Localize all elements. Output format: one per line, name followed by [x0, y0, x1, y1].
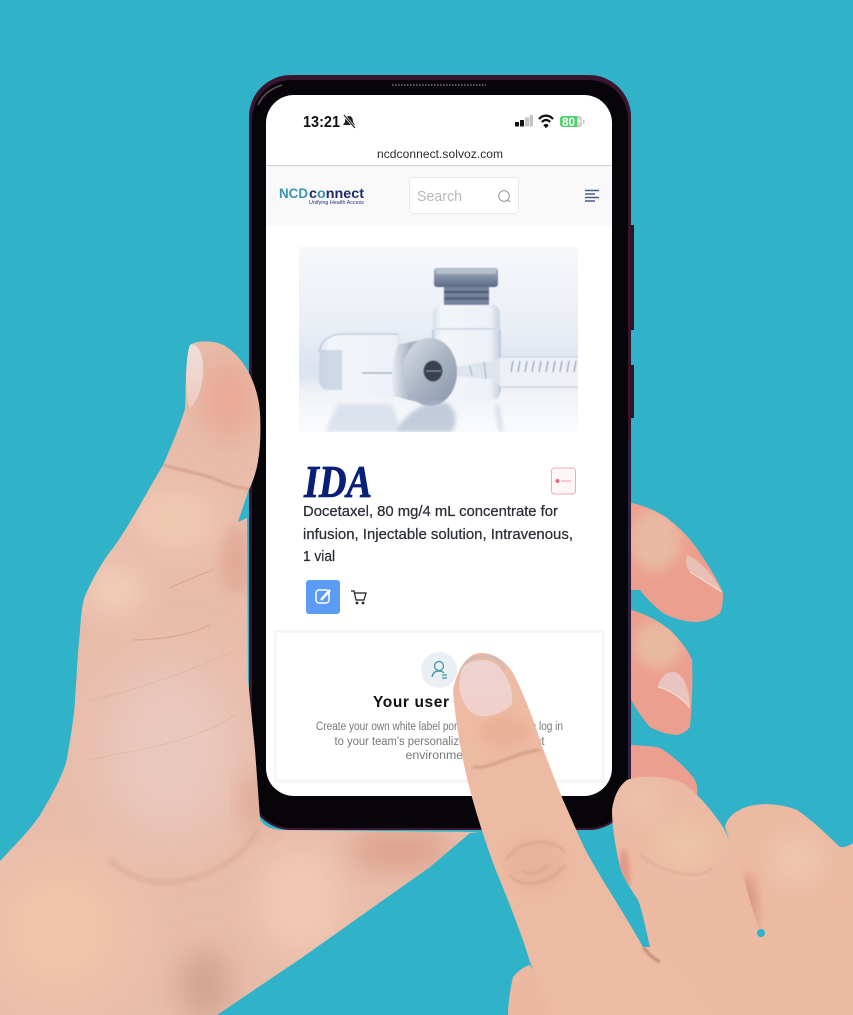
- clock: 13:21: [303, 114, 340, 131]
- button: edit: [306, 580, 340, 614]
- icon: battery: [560, 116, 584, 127]
- icon: muted bell: [343, 115, 355, 128]
- search box: [410, 178, 518, 214]
- icon: battery: 80: [562, 117, 575, 129]
- skin creases: [163, 465, 250, 489]
- left hand finger 1: [631, 503, 723, 622]
- logo: Unifying Health Access: [309, 200, 364, 206]
- logo: connect: [309, 185, 364, 201]
- card body text: environment: [406, 750, 474, 762]
- right hand lower thumb: [508, 965, 565, 1015]
- card: user portal: [274, 630, 605, 783]
- product photo: vials: [299, 247, 580, 432]
- right hand ring finger: [725, 804, 853, 1015]
- status bar: [304, 114, 584, 128]
- icon: wifi: [539, 116, 553, 126]
- product description: Docetaxel, 80 mg/4 mL concentrate for: [303, 503, 558, 520]
- logo: NCD: [279, 185, 308, 201]
- site header: [266, 165, 612, 214]
- icon: signal: [515, 115, 533, 126]
- reflection: [325, 402, 501, 432]
- left hand finger 2: [631, 610, 692, 735]
- product description: infusion, Injectable solution, Intravenous,: [303, 526, 573, 543]
- left hand finger 3: [625, 745, 697, 810]
- side buttons: [630, 225, 634, 418]
- thumb nail: [186, 344, 203, 408]
- badge: [552, 468, 576, 494]
- card body text: Create your own white label portal where you can log in: [316, 721, 563, 733]
- nail: [658, 672, 690, 708]
- icon: user: [421, 652, 457, 688]
- thumb shading: [198, 358, 258, 442]
- product description: [303, 503, 573, 565]
- search box: Search: [417, 188, 462, 205]
- right index finger: [453, 653, 661, 1015]
- logo: [280, 188, 364, 205]
- icon: menu: [585, 190, 599, 201]
- nail: [686, 555, 722, 592]
- phone body: [249, 75, 631, 830]
- card body text: [316, 721, 563, 762]
- card body text: to your team's personalized and compliant: [334, 736, 545, 748]
- left hand: [0, 335, 500, 1015]
- screen: [266, 95, 612, 796]
- icon: cart: [351, 591, 366, 604]
- index nail: [459, 660, 512, 716]
- brand logo: IDA: IDA: [303, 456, 372, 507]
- upright vial: [433, 268, 500, 400]
- gap between fingers: [757, 929, 765, 937]
- lying vial: [318, 333, 457, 406]
- url: ncdconnect.solvoz.com: [377, 147, 503, 161]
- card heading: Your user portal: [373, 694, 501, 711]
- phone: [249, 75, 634, 830]
- right hand middle finger: [612, 776, 759, 1003]
- product description: 1 vial: [303, 548, 335, 565]
- syringe: [445, 357, 580, 387]
